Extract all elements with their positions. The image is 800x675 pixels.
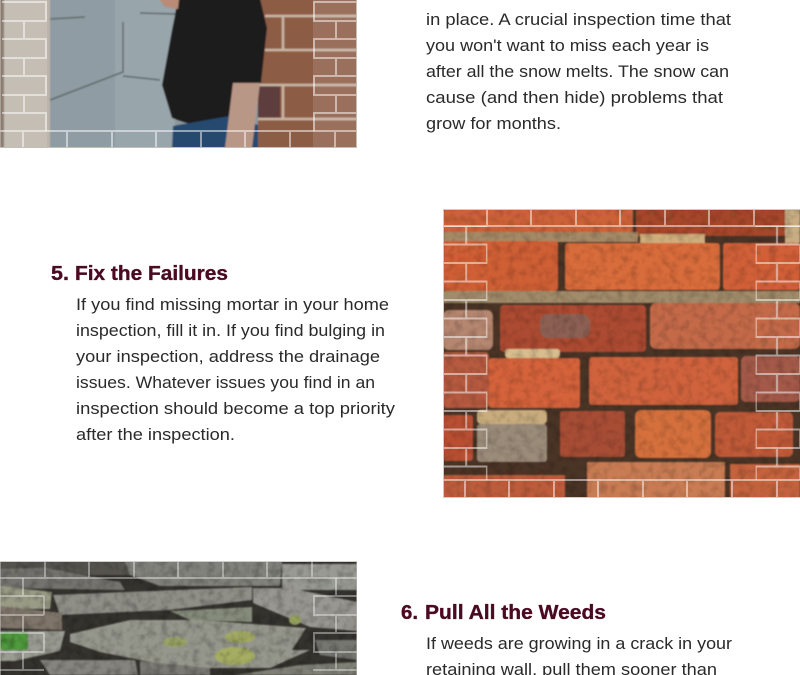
text block: tip 5 paragraph: If you find missing mortar in your home bbox=[76, 296, 389, 314]
text block: tip 5 paragraph: inspection, fill it in. If you find bulging in bbox=[76, 322, 385, 340]
text block: tip 4 paragraph: you won't want to miss each year is bbox=[426, 37, 709, 55]
text block: tip 5 paragraph: inspection should become a top priority bbox=[76, 400, 396, 418]
text block: tip 4 paragraph bbox=[426, 11, 731, 133]
text block: tip 4 paragraph: after all the snow melts. The snow can bbox=[426, 63, 729, 81]
photo: man inspecting a block and brick wall bbox=[0, 0, 357, 148]
photo: crumbling red brick wall bbox=[443, 209, 800, 498]
text block: tip 4 paragraph: in place. A crucial inspection time that bbox=[426, 11, 731, 29]
text block: tip 4 paragraph: grow for months. bbox=[426, 115, 561, 133]
text block: tip 5 paragraph: issues. Whatever issues you find in an bbox=[76, 374, 375, 392]
heading: 5. Fix the Failures: 5. bbox=[51, 263, 69, 285]
heading: 5. Fix the Failures: Fix the Failures bbox=[75, 263, 228, 285]
text block: tip 4 paragraph: cause (and then hide) problems that bbox=[426, 89, 723, 107]
heading: 6. Pull All the Weeds: 6. bbox=[401, 602, 418, 624]
text block: tip 5 paragraph: your inspection, address the drainage bbox=[76, 348, 380, 366]
text block: tip 5 paragraph: after the inspection. bbox=[76, 426, 235, 444]
photo: stacked stone wall with moss bbox=[0, 561, 357, 675]
text block: tip 6 paragraph bbox=[426, 635, 733, 675]
text block: tip 5 paragraph bbox=[76, 296, 396, 444]
text block: tip 6 paragraph: If weeds are growing in a crack in your bbox=[426, 635, 733, 653]
heading: 6. Pull All the Weeds: Pull All the Weeds bbox=[425, 602, 606, 624]
